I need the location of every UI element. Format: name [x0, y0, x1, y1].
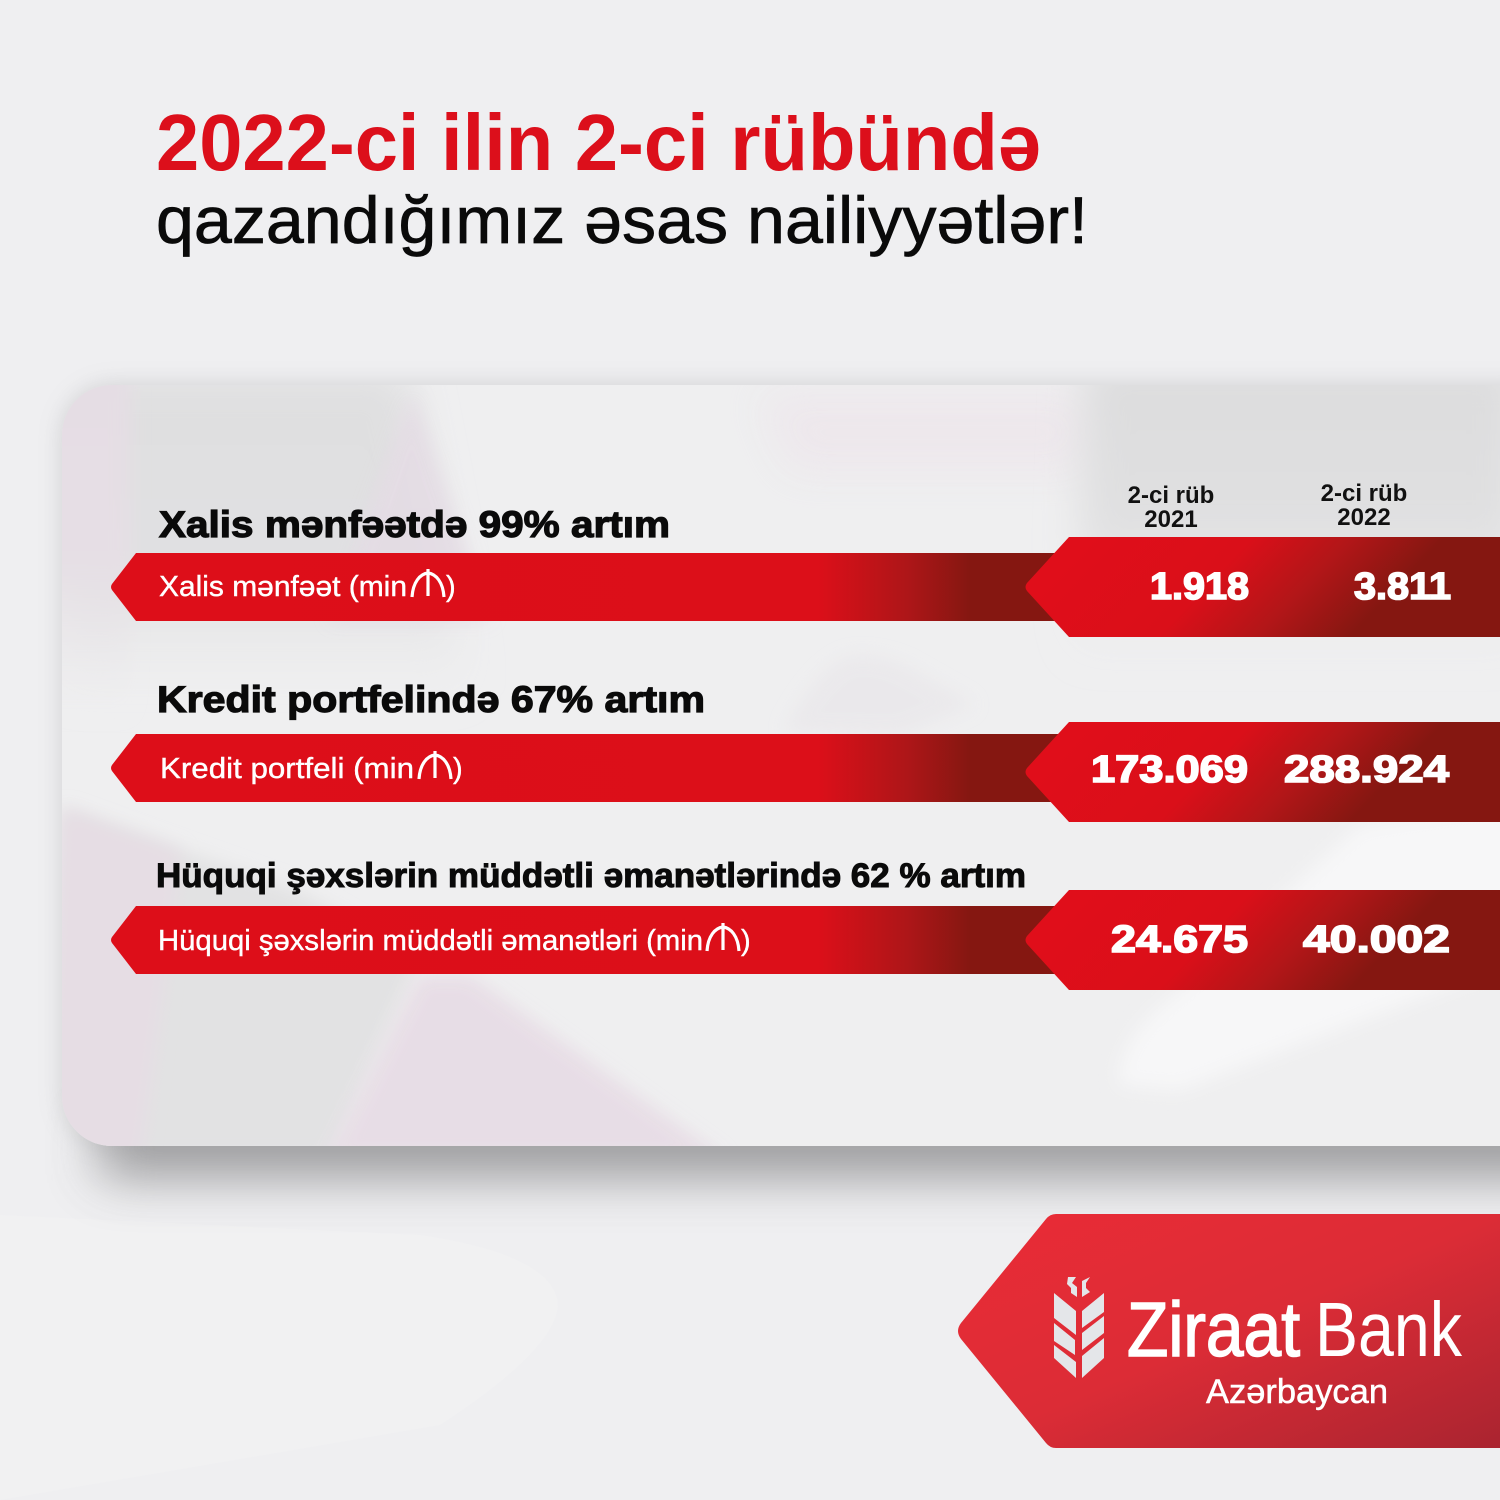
row 1 label: Xalis mənfəət (min — [159, 571, 407, 603]
row 1 closing bracket: ) — [446, 571, 456, 603]
background soft shape — [0, 1215, 558, 1500]
brand name — [1127, 1287, 1462, 1373]
brand country: Azərbaycan — [1206, 1373, 1388, 1411]
value 2021: 1.918 — [1150, 566, 1249, 608]
icon: manat — [412, 569, 444, 597]
value 2022: 288.924 — [1284, 749, 1449, 791]
panel — [40, 360, 1500, 1160]
title — [156, 98, 1088, 257]
row 1: net profit — [111, 504, 1500, 637]
row 2 closing bracket: ) — [453, 753, 463, 785]
brand name: Bank — [1315, 1287, 1462, 1373]
icon: manat — [419, 751, 451, 779]
value 2021: 24.675 — [1111, 919, 1248, 961]
title: qazandığımız əsas nailiyyətlər! — [156, 183, 1088, 257]
icon: manat — [707, 923, 739, 951]
column headers: 2021 — [1144, 506, 1198, 533]
row 2: loan portfolio — [111, 679, 1500, 822]
value 2021: 173.069 — [1091, 749, 1248, 791]
row 2 heading: Kredit portfelində 67% artım — [157, 679, 705, 720]
title: 2022-ci ilin 2-ci rübündə — [156, 98, 1041, 187]
row 3 value band — [1026, 890, 1500, 990]
column headers: 2-ci rüb — [1128, 482, 1214, 509]
row 2 label bar — [111, 734, 1060, 802]
row 3: corporate term deposits — [111, 857, 1500, 990]
value 2022: 40.002 — [1303, 919, 1450, 961]
column headers: 2-ci rüb — [1321, 480, 1407, 507]
value 2022: 3.811 — [1354, 566, 1451, 608]
row 1 heading: Xalis mənfəətdə 99% artım — [159, 504, 670, 545]
row 3 label bar — [111, 906, 1060, 974]
column headers — [1128, 480, 1407, 533]
column headers: 2022 — [1337, 504, 1391, 531]
row 2 value band — [1026, 722, 1500, 822]
brand name: Ziraat — [1127, 1287, 1300, 1373]
icon: wheat logo — [1054, 1277, 1104, 1378]
row 3 heading: Hüquqi şəxslərin müddətli əmanətlərində 62 % artım — [156, 857, 1026, 895]
row 2 label: Kredit portfeli (min — [160, 753, 414, 785]
row 3 closing bracket: ) — [741, 925, 751, 957]
row 3 label: Hüquqi şəxslərin müddətli əmanətləri (min — [158, 925, 703, 957]
row 1 label bar — [111, 553, 1060, 621]
row 1 value band — [1026, 537, 1500, 637]
logo badge — [958, 1214, 1500, 1448]
panel shadow — [62, 385, 1500, 1175]
